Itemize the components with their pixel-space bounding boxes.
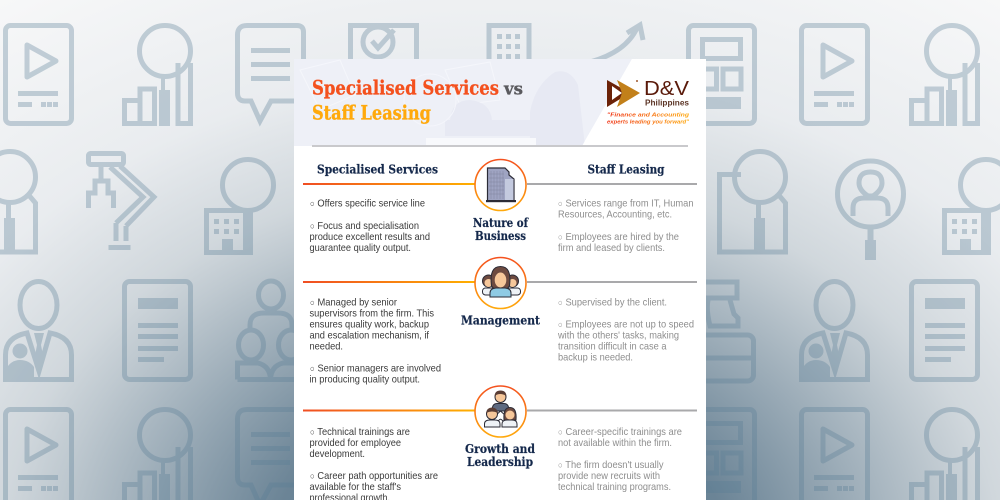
text: staff leasing growth: ○ The firm doesn't usually <box>558 460 664 471</box>
icon: speech bubble bottom <box>238 410 304 500</box>
icon: team of people <box>238 281 304 380</box>
icon: person in magnifier <box>838 161 904 260</box>
text: staff leasing growth: technical training programs. <box>558 482 671 493</box>
icon: team hierarchy <box>475 386 526 437</box>
text: specialised management: ensures quality work, backup <box>310 320 429 330</box>
label: Nature of Business: Business <box>475 228 526 243</box>
icon: magnifier document right <box>720 152 786 254</box>
text: staff leasing nature of business: firm and leased by clients. <box>558 243 665 254</box>
text: specialised nature of business: produce excellent results and <box>310 232 430 243</box>
logo: D&V Philippines <box>607 78 690 126</box>
icon: suited person left <box>6 282 72 381</box>
text: staff leasing management: ○ Supervised by the client. <box>558 298 667 308</box>
label: Growth and Leadership: Leadership <box>467 454 533 469</box>
icon: magnifier chart top right <box>912 26 978 126</box>
icon: robotic arm <box>88 154 154 248</box>
icon: checklist <box>350 26 416 124</box>
text: specialised growth <box>310 427 438 500</box>
text: staff leasing nature of business: ○ Services range from IT, Human <box>558 198 694 210</box>
title: vs <box>503 80 523 100</box>
icon: building grid <box>489 26 529 106</box>
icon: magnifier building right <box>942 160 1000 255</box>
text: specialised management: ○ Senior managers are involved <box>310 364 441 374</box>
label: Management: Management <box>461 312 540 328</box>
icon: office building <box>475 160 526 210</box>
text: staff leasing growth: ○ Career-specific trainings are <box>558 427 682 438</box>
text: specialised growth: ○ Technical trainings are <box>310 427 410 438</box>
icon: team of women <box>475 258 526 308</box>
text: staff leasing nature of business: ○ Employees are hired by the <box>558 232 679 243</box>
section: Management <box>303 258 697 386</box>
label: Nature of Business <box>473 215 529 243</box>
text: staff leasing growth <box>558 427 682 493</box>
logo: D&V Philippines: "Finance and Accounting <box>607 112 690 118</box>
label: Nature of Business: Nature of <box>473 215 529 230</box>
text: specialised nature of business: ○ Offers specific service line <box>310 198 425 210</box>
icon: document left <box>124 282 190 380</box>
text: specialised management: needed. <box>310 342 343 352</box>
title <box>312 76 523 124</box>
text: staff leasing management: transition difficult in case a <box>558 342 667 352</box>
text: specialised management <box>310 298 441 386</box>
text: staff leasing nature of business <box>558 198 694 254</box>
section: Nature of Business <box>303 160 697 254</box>
column heading: Specialised Services: Specialised Services <box>317 162 438 176</box>
text: specialised growth: development. <box>310 449 365 460</box>
text: specialised growth: available for the staff's <box>310 482 401 493</box>
column heading: Staff Leasing: Staff Leasing <box>588 162 665 176</box>
icon: hand on box <box>688 282 754 381</box>
text: specialised growth: ○ Career path opportunities are <box>310 471 438 482</box>
header photo band <box>294 59 632 146</box>
icon: magnifier building left <box>204 160 274 255</box>
icon: suited person right <box>802 282 868 381</box>
icon: layout document top <box>688 26 754 124</box>
title: Staff Leasing <box>312 100 431 124</box>
text: staff leasing management: backup is needed. <box>558 352 633 364</box>
text: specialised management: in producing quality output. <box>310 374 420 386</box>
icon: play document top right <box>802 26 868 124</box>
text: specialised nature of business: ○ Focus and specialisation <box>310 221 419 232</box>
icon: magnifier chart top left <box>124 26 190 126</box>
text: specialised nature of business: guarantee quality output. <box>310 243 411 254</box>
icon: magnifier chart bottom left <box>124 410 190 500</box>
icon: layout document bottom <box>688 410 754 500</box>
icon: play document top left <box>6 26 72 124</box>
section: Growth and Leadership <box>303 386 697 500</box>
icon: play document bottom right <box>802 410 868 500</box>
text: specialised growth: provided for employee <box>310 438 401 449</box>
logo: D&V Philippines: Philippines <box>645 98 689 108</box>
text: staff leasing management <box>557 298 694 364</box>
text: staff leasing nature of business: Resources, Accounting, etc. <box>558 210 672 220</box>
icon: magnifier chart bottom right <box>912 410 978 500</box>
title: Specialised Services <box>312 76 499 100</box>
logo: D&V Philippines: D&V <box>644 78 690 100</box>
text: staff leasing growth: not available within the firm. <box>558 438 672 449</box>
text: staff leasing growth: provide new recruits with <box>558 471 660 482</box>
panel: infographic sheet <box>294 59 706 500</box>
icon: speech bubble top <box>238 26 304 121</box>
text: specialised management: and escalation mechanism, if <box>310 330 429 342</box>
text: staff leasing management: with the others' tasks, making <box>557 330 679 342</box>
logo: D&V Philippines: experts leading you forward" <box>607 120 689 126</box>
label: Growth and Leadership: Growth and <box>465 441 535 456</box>
text: specialised management: supervisors from the firm. This <box>310 308 434 320</box>
icon: magnifier document left <box>0 152 36 254</box>
text: staff leasing management: ○ Employees are not up to speed <box>558 320 694 330</box>
icon: document right <box>912 282 978 380</box>
text: specialised management: ○ Managed by senior <box>310 298 397 308</box>
icon: growth arrow <box>590 25 643 62</box>
label: Growth and Leadership <box>465 441 535 469</box>
icon: play document bottom left <box>6 410 72 500</box>
text: specialised nature of business <box>310 198 430 254</box>
